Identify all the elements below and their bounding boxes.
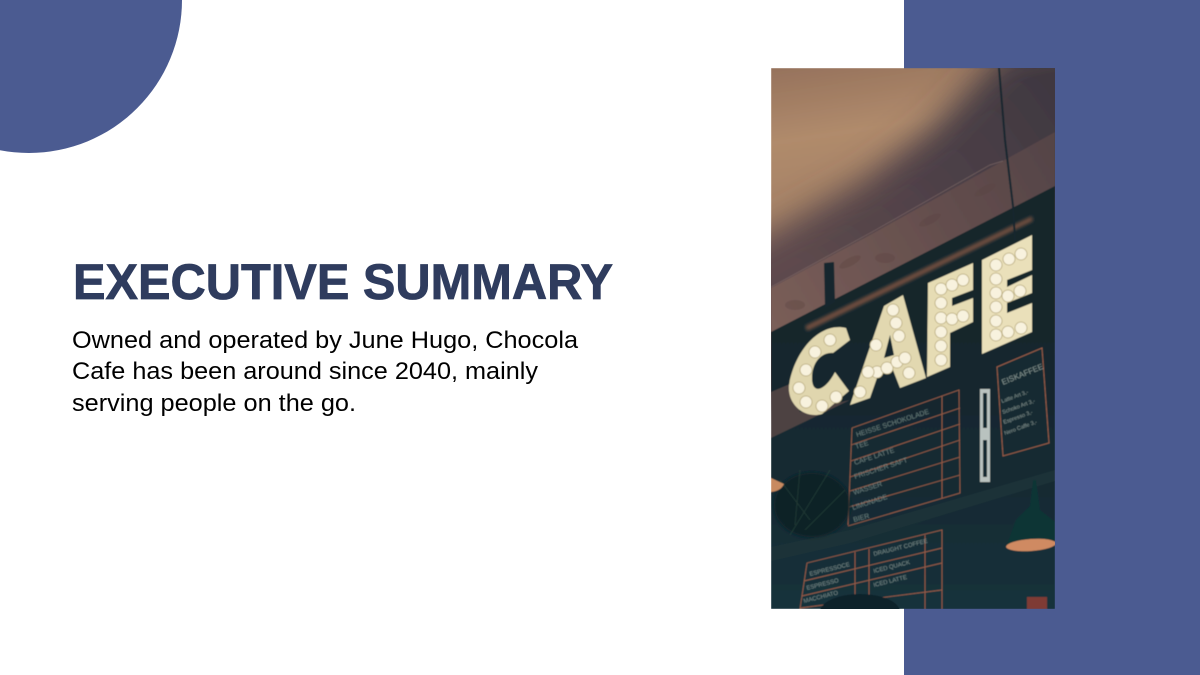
chalk menu board: coffee: ESPRESSO bbox=[806, 578, 840, 592]
chalk menu board: iced coffee: Nero Caffe 3,- bbox=[1004, 419, 1038, 437]
chalk menu board: drinks: FRISCHER SAFT bbox=[853, 457, 909, 481]
marquee letters CAFE bbox=[789, 235, 1032, 415]
shelf below the drinks board bbox=[808, 480, 1037, 539]
number nine plaque bbox=[980, 389, 990, 482]
blue side panel bbox=[904, 0, 1200, 675]
chalk menu board: drinks: CAFE LATTE bbox=[853, 447, 896, 467]
chalk menu board: coffee: MACCHIATO bbox=[803, 590, 839, 605]
quarter circle decoration bbox=[0, 0, 182, 153]
summary paragraph: Owned and operated by June Hugo, Chocola bbox=[72, 327, 579, 354]
chalk menu board: coffee: DRAUGHT COFFEE bbox=[873, 539, 928, 558]
chalk menu board: drinks: HEISSE SCHOKOLADE bbox=[855, 409, 930, 439]
chalk menu board: coffee: ICED LATTE bbox=[873, 575, 908, 589]
chalk menu board: drinks: LIMONADE bbox=[851, 494, 889, 512]
chalk menu board: iced coffee: EISKAFFEE bbox=[1000, 362, 1045, 387]
summary paragraph: Cafe has been around since 2040, mainly bbox=[72, 358, 538, 385]
summary paragraph: serving people on the go. bbox=[72, 390, 356, 417]
hanging lamps and plant bbox=[771, 470, 1055, 609]
chalk menu board: drinks: TEE bbox=[854, 440, 870, 451]
chalk menu board: drinks: BIER bbox=[853, 513, 870, 524]
chalk menu board: coffee: ICED QUACK bbox=[873, 560, 911, 575]
summary paragraph bbox=[72, 327, 579, 417]
chalk menu board: drinks: WASSER bbox=[852, 481, 883, 497]
chalk menu board: drinks bbox=[848, 390, 960, 526]
title: EXECUTIVE SUMMARY bbox=[73, 254, 613, 310]
chalk menu board: iced coffee: Latte Art 3,- bbox=[1001, 389, 1030, 405]
chalk menu board: iced coffee bbox=[997, 348, 1049, 456]
chalk menu board: coffee bbox=[800, 530, 942, 609]
chalk menu board: coffee: ESPRESSOCE bbox=[809, 562, 851, 578]
photo: cafe marquee sign and menu boards bbox=[771, 68, 1055, 609]
chalk menu board: iced coffee: Espresso 3,- bbox=[1003, 410, 1034, 426]
chalk menu board: iced coffee: Schoko Art 3,- bbox=[1002, 398, 1036, 416]
